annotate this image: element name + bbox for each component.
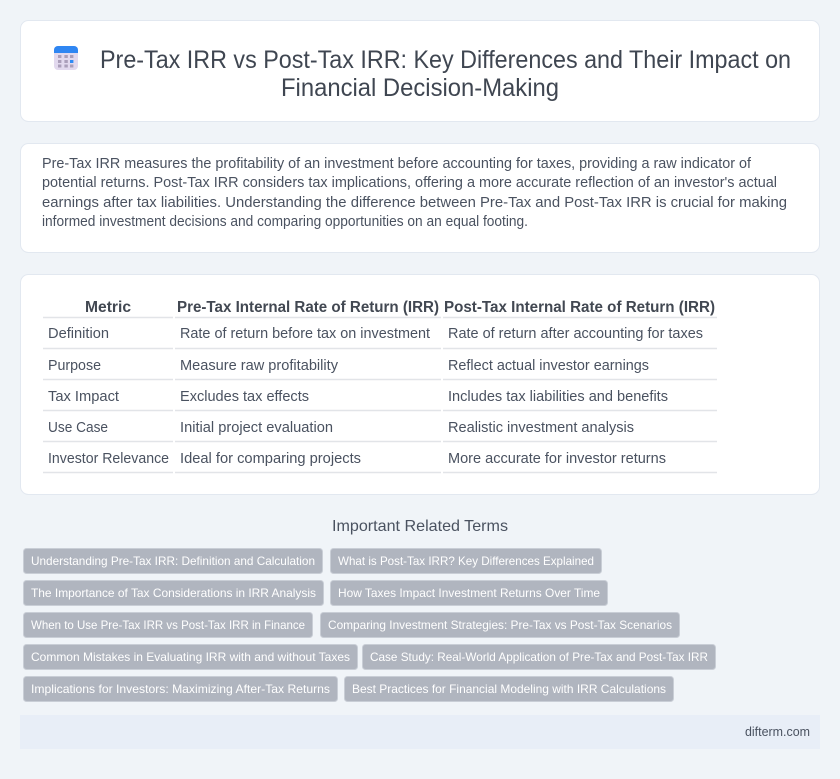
table row: purpose: Reflect actual investor earnings [448, 358, 649, 374]
table row: use case: Realistic investment analysis [448, 420, 634, 436]
table row: purpose [48, 358, 649, 374]
icon: calendar [54, 46, 78, 70]
table row: tax impact: Includes tax liabilities and benefits [448, 389, 668, 405]
panel: introduction [20, 144, 820, 252]
table row: investor relevance: Investor Relevance [48, 451, 169, 467]
tag [24, 580, 324, 606]
table row: definition: Rate of return after accounting for taxes [448, 326, 703, 342]
tag: When to Use Pre-Tax IRR vs Post-Tax IRR in Finance [31, 618, 305, 632]
table row: investor relevance [48, 451, 666, 467]
text block: introduction: informed investment decisions and comparing opportunities on an equal footing. [42, 214, 528, 230]
tag: The Importance of Tax Considerations in IRR Analysis [31, 586, 316, 600]
tag [330, 548, 602, 574]
footer: difterm.com [745, 725, 810, 739]
table header: Pre-Tax Internal Rate of Return (IRR) [177, 299, 439, 316]
table header: Metric [85, 299, 131, 316]
table row: use case: Use Case [48, 420, 108, 436]
title [100, 46, 791, 102]
text block: introduction [42, 156, 787, 230]
table row: purpose: Purpose [48, 358, 101, 374]
tag [320, 612, 680, 638]
table header [85, 299, 715, 316]
text block: introduction: earnings after tax liabilities. Understanding the difference between Pre-Tax and Post-Tax IRR is crucial for making [42, 195, 787, 211]
tag: Implications for Investors: Maximizing After-Tax Returns [31, 682, 330, 696]
table row: tax impact: Excludes tax effects [180, 389, 309, 405]
table row: use case [48, 420, 634, 436]
table row: tax impact: Tax Impact [48, 389, 119, 405]
tag: What is Post-Tax IRR? Key Differences Explained [338, 554, 594, 568]
tag [24, 548, 322, 574]
tag list: related terms [24, 548, 716, 702]
panel: header [20, 20, 820, 122]
tag: Understanding Pre-Tax IRR: Definition and Calculation [31, 554, 315, 568]
tag [330, 580, 608, 606]
text block: introduction: Pre-Tax IRR measures the profitability of an investment before accounting for taxes, providing a raw indicator of [42, 156, 752, 172]
table row: investor relevance: Ideal for comparing projects [180, 451, 361, 467]
tag: Best Practices for Financial Modeling with IRR Calculations [352, 682, 666, 696]
table row: definition: Definition [48, 326, 109, 342]
tag [24, 612, 312, 638]
tag: Comparing Investment Strategies: Pre-Tax vs Post-Tax Scenarios [328, 618, 672, 632]
tag: Case Study: Real-World Application of Pre-Tax and Post-Tax IRR [370, 650, 708, 664]
tag [362, 644, 716, 670]
tag [24, 644, 358, 670]
title: Financial Decision-Making [281, 74, 559, 102]
footer [20, 715, 820, 749]
text block: introduction: potential returns. Post-Tax IRR considers tax implications, offering a more accurate reflection of an investor's actual [42, 175, 777, 191]
tag [24, 676, 338, 702]
tag: How Taxes Impact Investment Returns Over Time [338, 586, 600, 600]
table row: use case: Initial project evaluation [180, 420, 333, 436]
tag [344, 676, 674, 702]
table row: definition [48, 326, 703, 342]
table header: Post-Tax Internal Rate of Return (IRR) [444, 299, 715, 316]
table row: tax impact [48, 389, 668, 405]
title: Pre-Tax IRR vs Post-Tax IRR: Key Differences and Their Impact on [100, 46, 791, 74]
heading: related terms: Important Related Terms [332, 518, 508, 535]
tag: Common Mistakes in Evaluating IRR with and without Taxes [31, 650, 350, 664]
table row: investor relevance: More accurate for investor returns [448, 451, 666, 467]
table row: definition: Rate of return before tax on investment [180, 326, 430, 342]
table row: purpose: Measure raw profitability [180, 358, 339, 374]
panel: comparison table [20, 274, 820, 494]
